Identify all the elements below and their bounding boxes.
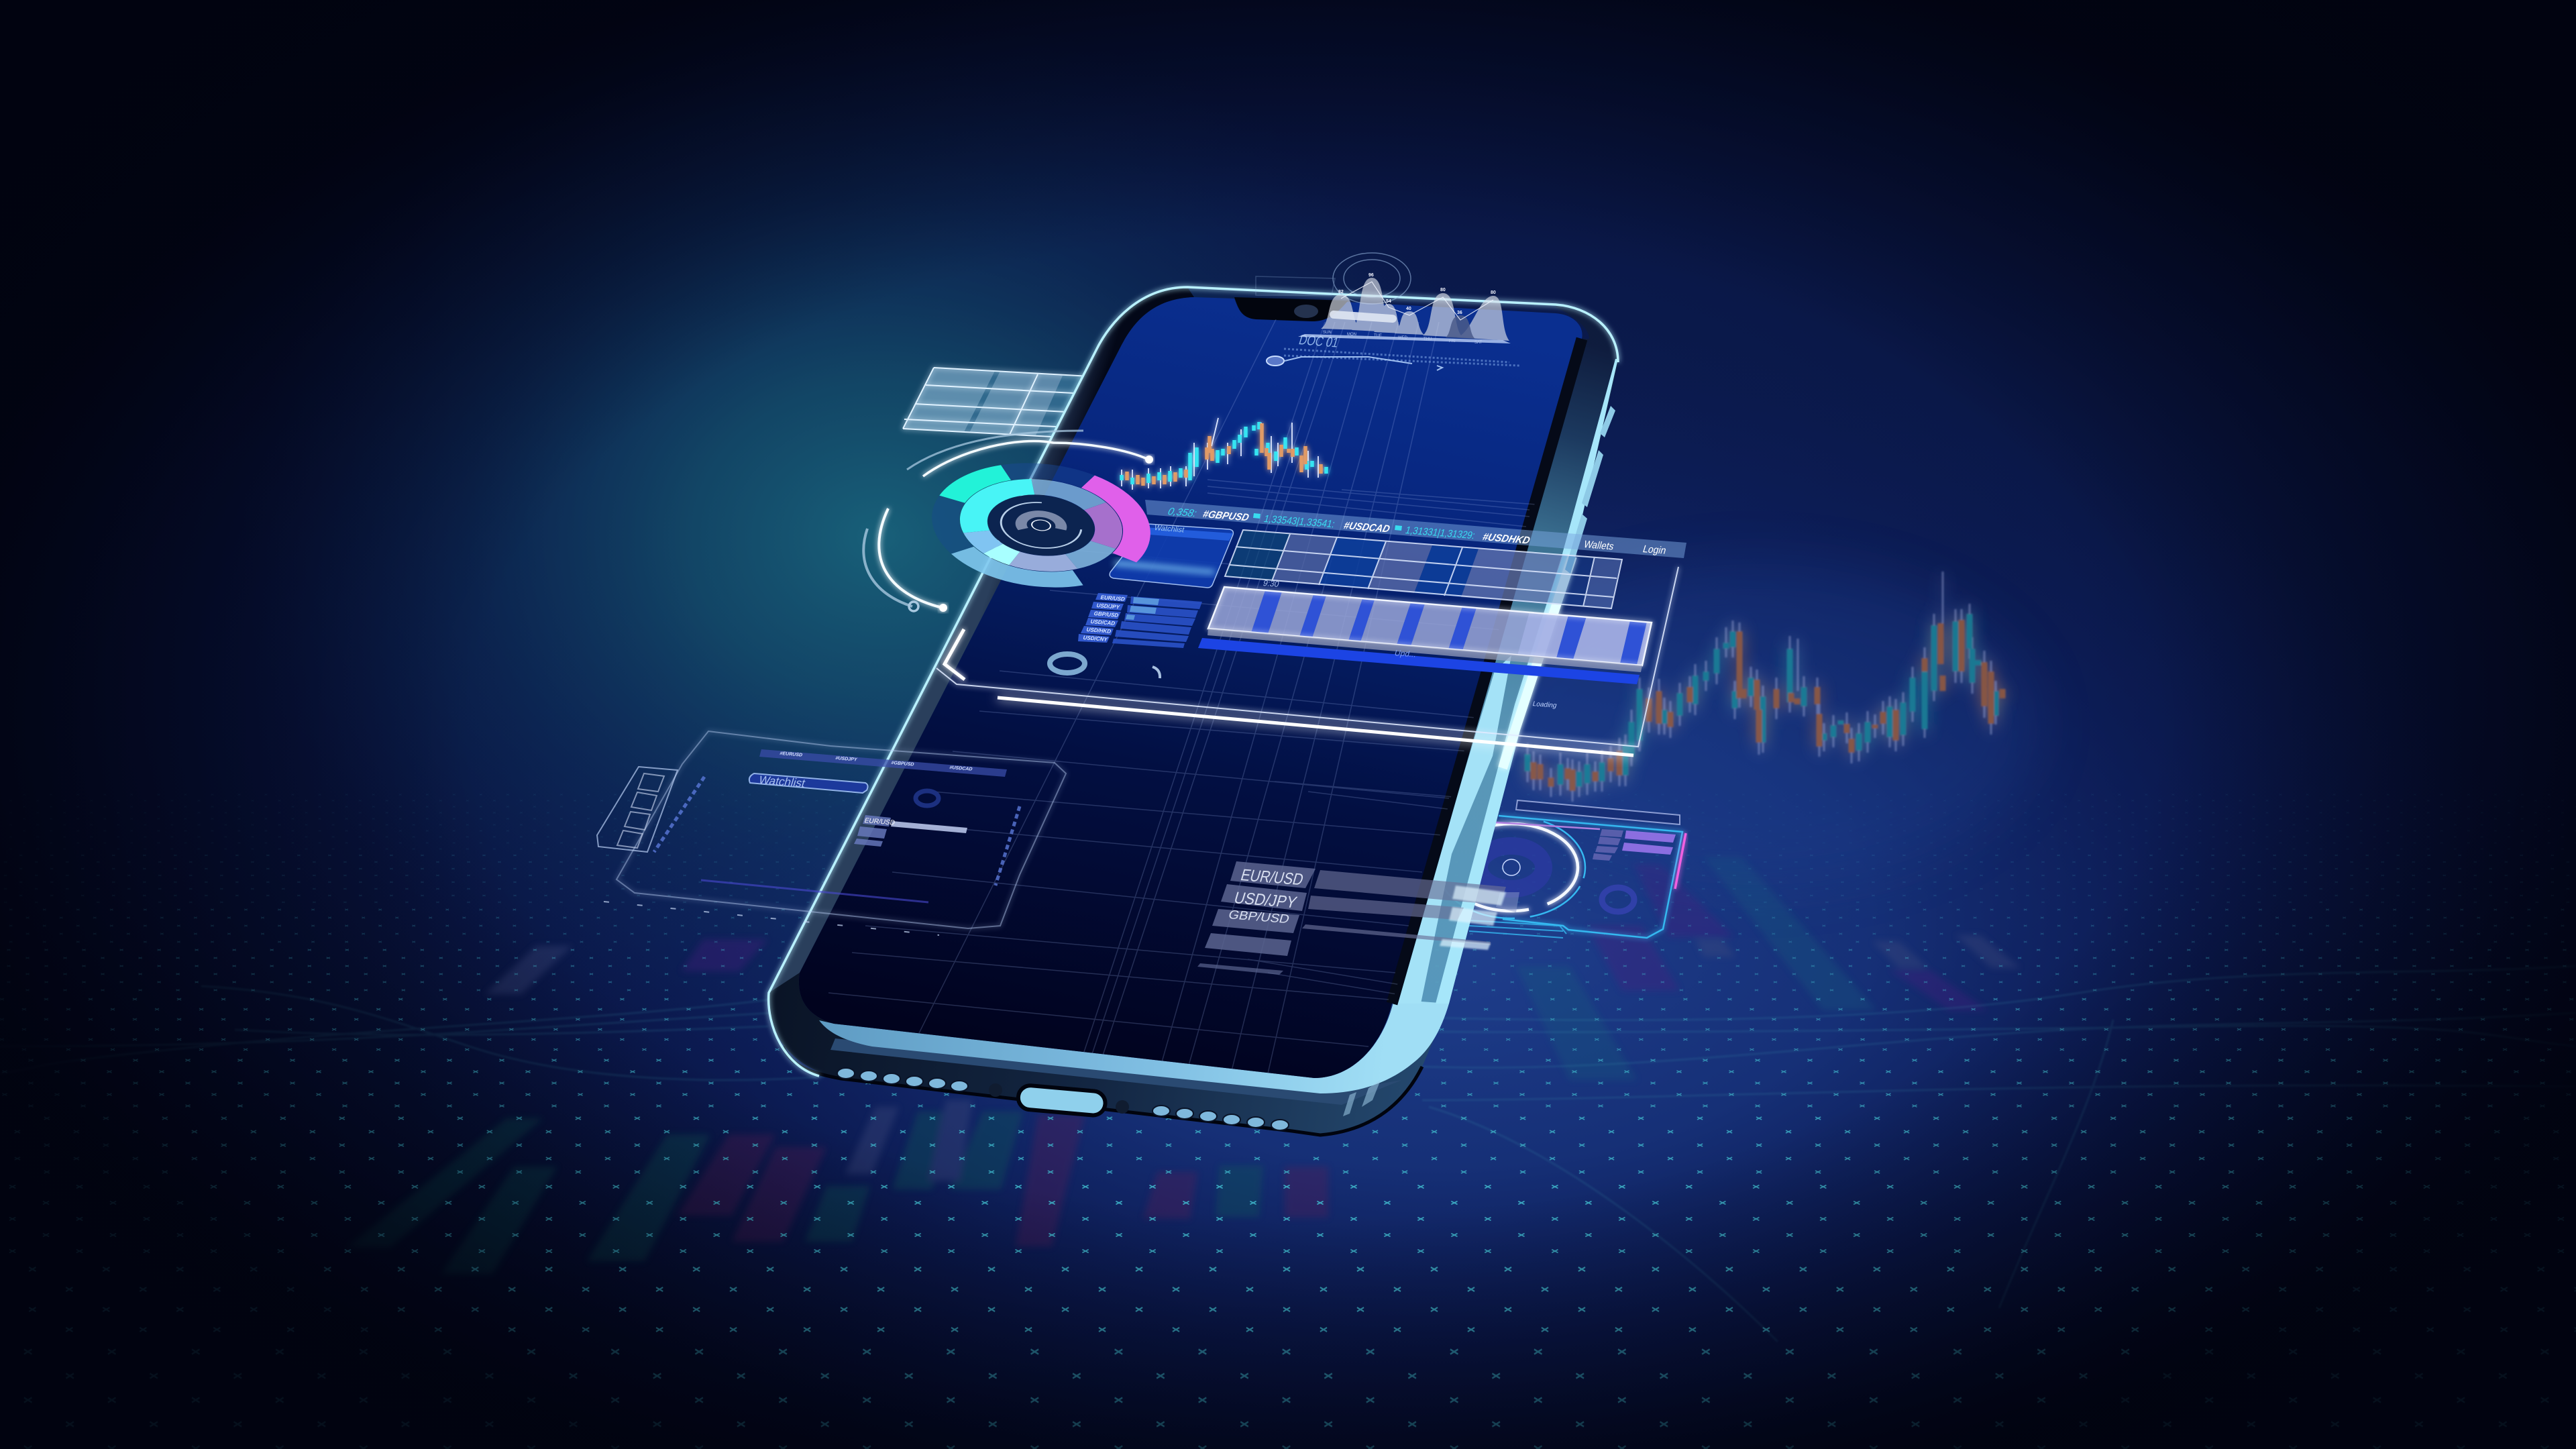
screen: [799, 297, 1582, 1078]
ticker strip: [1145, 500, 1686, 558]
ground flowing lines: [0, 966, 2576, 1342]
phone band on the right: [1392, 305, 1618, 1004]
donut arc upper: [923, 441, 1148, 476]
peak values: 54: [1386, 299, 1391, 304]
dashed panel bars: [654, 777, 1020, 885]
phone outer black underline: [783, 1046, 1422, 1135]
ring segments: [940, 462, 1142, 589]
weekday labels: SUN: [1323, 331, 1332, 335]
dial inner donut: [1479, 846, 1544, 889]
ground faded candlesticks: [347, 857, 2021, 1274]
left floating grid panel: [903, 368, 1100, 437]
black inner bezel on the right: [1392, 339, 1582, 1004]
lower rate rows: GBP/USD: [1227, 907, 1291, 926]
peak values: 96: [1368, 273, 1374, 278]
panel purple line: [701, 880, 928, 902]
phone underside body: [769, 973, 1449, 1135]
peak values: 36: [1457, 311, 1462, 315]
left panel price rows: EUR/USD: [863, 817, 896, 827]
donut arc upper pale: [907, 431, 1083, 470]
mountain chart: [1298, 273, 1511, 345]
weekday labels: WED: [1398, 336, 1408, 340]
currency list: USD/CNY: [1082, 635, 1109, 643]
camera: [1294, 305, 1318, 318]
ring icon: [1050, 654, 1085, 673]
donut arc left: [879, 508, 943, 608]
left panel watchlist pill: Watchlist: [757, 773, 807, 790]
dial cyan arc: [1438, 816, 1585, 918]
phone: [769, 287, 1618, 1135]
ticker strip: #USDHKD: [1481, 531, 1532, 547]
currency list: GBP/USD: [1093, 610, 1120, 619]
doc header: [1267, 332, 1519, 370]
speaker holes left: [837, 1068, 968, 1091]
donut chart: [863, 431, 1153, 612]
table panel: [1225, 530, 1622, 608]
pill over chart: [1330, 311, 1397, 323]
hologram glow behind right chart: [1476, 564, 2039, 885]
toolbar icons: [617, 773, 664, 848]
white end dot: [1145, 455, 1153, 464]
bar panel: [1198, 587, 1652, 684]
weekday labels: [1323, 331, 1483, 345]
left panel price rows: [854, 791, 967, 847]
small ring: [1602, 888, 1634, 912]
inner light wedge: [1398, 655, 1511, 1004]
left panel ticker: #EURUSD: [779, 751, 803, 758]
phone left glass bezel: [769, 287, 1194, 1079]
left end dots: [909, 602, 947, 612]
panel tick row: [604, 902, 939, 935]
magenta edge line: [1675, 833, 1686, 889]
weekday labels: THU: [1424, 337, 1432, 341]
peak values: [1338, 273, 1496, 315]
right candlestick chart: [1527, 572, 2002, 802]
weekday labels: FRI: [1449, 339, 1456, 343]
doc header: DOC 01: [1297, 332, 1340, 351]
loading label: Loading: [1532, 700, 1558, 710]
dark bell: [1446, 315, 1475, 339]
bright chevron: [945, 629, 965, 680]
bar panel: Upd...: [1393, 648, 1417, 659]
left panel ticker: #USDJPY: [835, 755, 858, 763]
weekday labels: MON: [1347, 333, 1356, 337]
peak values: 40: [1406, 307, 1411, 311]
teal candle bodies: [1527, 614, 1996, 787]
phone bottom rim: [819, 1000, 1449, 1093]
chart wicks: [1527, 572, 1996, 802]
outer rim stripe: [1436, 359, 1618, 1004]
dial centre: [1503, 859, 1520, 875]
lower rate rows: EUR/USD: [1238, 866, 1305, 889]
left bright edge: [769, 287, 1618, 1076]
ticker strip: #GBPUSD: [1201, 508, 1250, 523]
donut arc left pale: [863, 529, 912, 606]
ticker strip: 0,358:: [1167, 506, 1198, 519]
speaker holes right: [1152, 1106, 1289, 1130]
ticker strip: 1,33543|1,33541:: [1263, 513, 1336, 530]
screen thin grid lines: [828, 315, 1536, 1073]
purple rows: [1622, 830, 1676, 855]
left panel watchlist pill: [749, 773, 868, 793]
rim highlight: [1503, 556, 1572, 768]
glass bands crossing rim: [1440, 885, 1506, 950]
currency list: [1078, 593, 1202, 648]
charging port: [1017, 1085, 1106, 1116]
left floating HUD panel: [597, 731, 1066, 935]
bell shapes: [1321, 278, 1509, 341]
phone bottom strip: [830, 1038, 1402, 1105]
rim corner notches: [1343, 1080, 1381, 1116]
notch: [1234, 297, 1348, 321]
small HUD bar above right panel: [1516, 800, 1680, 824]
toolbar frame: [597, 767, 678, 852]
long bright line: [998, 698, 1633, 755]
peak values: 80: [1440, 288, 1446, 292]
ticker strip: Login: [1642, 543, 1668, 557]
right HUD panel: [1438, 816, 1686, 938]
left panel ticker: [759, 749, 1007, 777]
currency list: USD/HKD: [1085, 627, 1112, 635]
chart base band: [1298, 334, 1511, 343]
left panel ticker: #USDCAD: [949, 765, 973, 772]
ticker strip: #USDCAD: [1342, 520, 1391, 535]
lower rate rows: [1197, 861, 1519, 975]
watchlist card: [1110, 524, 1233, 588]
peak polyline: [1341, 282, 1493, 320]
peak values: 82: [1338, 290, 1344, 294]
ticker strip: Wallets: [1582, 539, 1615, 552]
currency list: USD/CAD: [1089, 619, 1116, 627]
dial white arc: [1445, 824, 1578, 911]
currency list: USD/JPY: [1095, 602, 1121, 610]
table panel: 9:30: [1262, 578, 1281, 589]
screen candlestick chart: [1122, 418, 1326, 490]
orange candle bodies: [1534, 620, 2002, 791]
lower rate rows: USD/JPY: [1232, 889, 1299, 912]
weekday labels: TUE: [1374, 334, 1382, 338]
watchlist card: Watchlist: [1153, 524, 1186, 535]
top ring over chart: [1256, 253, 1411, 304]
weekday labels: SAT: [1474, 341, 1483, 345]
side buttons: [1565, 406, 1615, 574]
small arc icon: [1152, 667, 1160, 678]
left panel ticker: #GBPUSD: [890, 760, 915, 767]
peak values: 80: [1491, 290, 1496, 295]
cyan trace lines: [1469, 920, 1566, 938]
large frame around bar panel: [936, 567, 1678, 747]
currency list: EUR/USD: [1099, 594, 1126, 602]
ground dot grid: [0, 792, 2576, 1449]
port screws: [989, 1083, 1129, 1114]
ticker strip: 1,31331|1,31329:: [1404, 525, 1477, 541]
